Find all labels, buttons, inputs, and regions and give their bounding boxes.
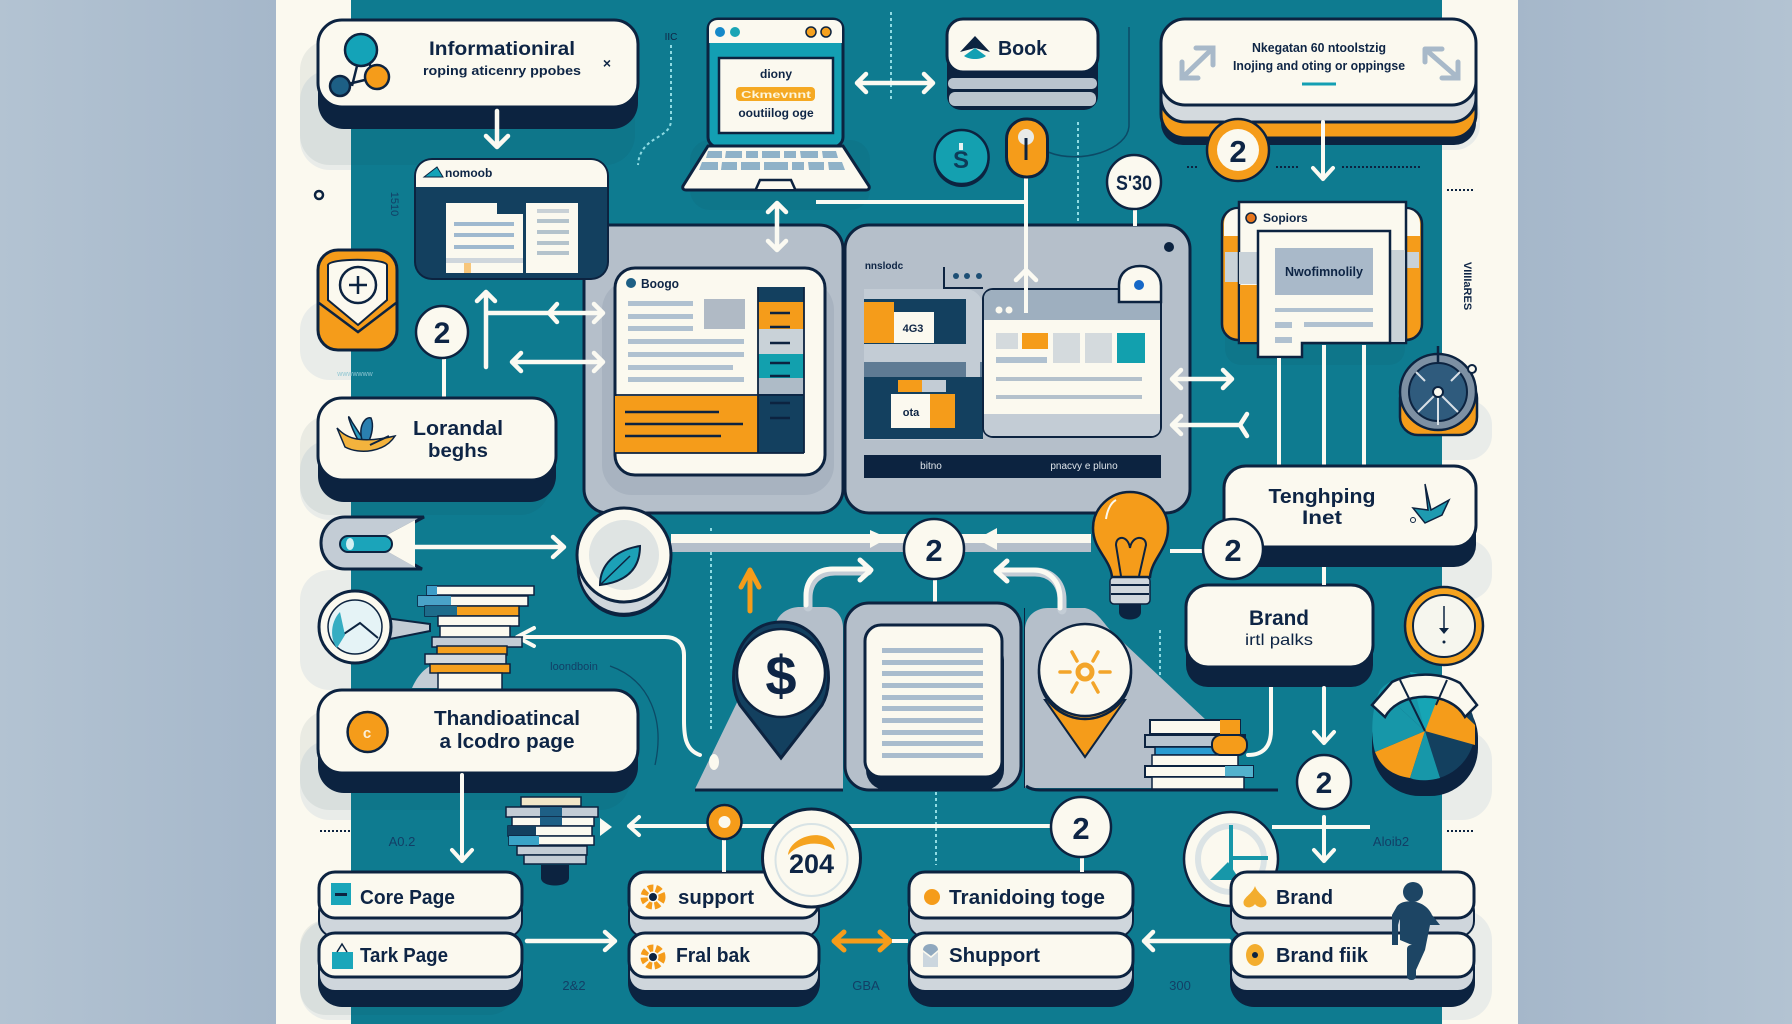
panel: support stack: Fral bak [676, 945, 751, 967]
icon: book pile right [1145, 720, 1253, 789]
arrow: orange up [741, 570, 759, 611]
icon: dollar pin: $ [765, 644, 797, 707]
connectors: support to tenghping [1279, 345, 1364, 465]
panel: core pages stack [300, 872, 523, 1015]
panel: right grey dashboard panel [845, 225, 1190, 513]
badge: 2 centre: 2 [925, 533, 943, 568]
panel: brand stack: Brand [1276, 887, 1333, 909]
icon: clock [1405, 587, 1483, 665]
connector: orange arrow to card [892, 939, 908, 943]
badge: orange 2 [1207, 119, 1269, 181]
arrow: laptop to book [857, 74, 933, 92]
connector: thick horizontal bus [671, 528, 1091, 552]
panel: support document: Nwofimnolily [1285, 264, 1364, 279]
small margin labels: A0.2 [389, 834, 415, 849]
panel: support document: Sopiors [1263, 211, 1308, 225]
connector: white horizontal line [816, 200, 1026, 204]
dark footer bar: bitno [920, 461, 942, 472]
panel: lorandal card: Lorandal [413, 418, 503, 440]
small margin labels: VIIIIaRES [1461, 262, 1473, 310]
badge: 204 [762, 809, 860, 907]
badge: 204: 204 [789, 849, 834, 879]
panel: core pages stack: Tark Page [360, 945, 448, 967]
panel: informational card [300, 20, 638, 165]
panel: trandoing stack: Tranidoing toge [949, 887, 1105, 909]
arrow: laptop panel double [768, 203, 786, 250]
panel: book stack card: Book [998, 38, 1048, 60]
small margin labels: 300 [1169, 978, 1191, 993]
icon: teal dollar coin [934, 130, 990, 187]
panel: right grey dashboard panel: nnslodc [865, 261, 904, 272]
arrow: support trandoing double orange [834, 932, 890, 950]
badge: 2 lower right: 2 [1316, 767, 1332, 800]
icon: sun pin [1039, 624, 1131, 757]
badge: 2 bottom centre: 2 [1072, 811, 1090, 846]
panel: brand stack [1230, 872, 1475, 1007]
connector: line to right [1272, 825, 1370, 829]
icon: crystal bird [337, 417, 395, 451]
panel: navigation card: Nkegatan 60 ntoolstzig [1252, 40, 1386, 55]
panel: thandioatincal card [300, 690, 638, 810]
panel: brand card: irtl palks [1245, 632, 1313, 649]
panel: left grey browser panel [584, 225, 843, 513]
arrow: long horizontal [629, 817, 1050, 835]
icon: network nodes [330, 34, 389, 96]
connectors: tenghping brand [1322, 567, 1326, 585]
icon: laptop: diony [760, 67, 792, 81]
panel: lorandal card: beghs [428, 441, 488, 462]
badge: S'30: S'30 [1116, 172, 1152, 195]
small margin labels: Aloib2 [1373, 834, 1409, 849]
document window: Boogo [641, 276, 679, 291]
arrow: 2 to brand stack [1314, 817, 1334, 861]
icon: leaf disc [577, 508, 671, 617]
curved arrows [806, 560, 1062, 610]
connector and badge: 2 beside tenghping: 2 [1224, 533, 1242, 568]
badge: 2 left: 2 [434, 317, 450, 350]
small margin labels: 2&2 [562, 978, 586, 993]
arrow: thand card to core [452, 775, 472, 861]
panel: thandioatincal card: Thandioatincal [434, 708, 580, 730]
panel: navigation card [1161, 19, 1476, 145]
document window [615, 268, 825, 475]
panel: informational card: Informationiral [429, 39, 575, 60]
badge: S'30 [1107, 155, 1161, 226]
small margin labels: GBA [852, 978, 880, 993]
arrows: dashboard right [1172, 370, 1247, 436]
arrow: core to support [527, 932, 615, 950]
arrow: brand to trandoing [1144, 932, 1229, 950]
icon: tag pill [321, 517, 424, 569]
badge: 2 left [416, 306, 468, 358]
panel: dark book window: nomoob [445, 166, 492, 180]
icon: laptop [683, 19, 870, 210]
badge: orange 2: 2 [1229, 134, 1247, 169]
small margin labels: loondboin [550, 661, 598, 673]
panel: dark book window [414, 158, 609, 280]
panel: navigation card: Inojing and oting or oppingse [1233, 58, 1405, 73]
panel: tenghping card [1224, 466, 1476, 567]
small margin labels [315, 191, 1473, 993]
connector and badge: 2 beside tenghping [1170, 519, 1263, 579]
book stack tower left [412, 586, 534, 690]
icon: dollar pin [734, 622, 828, 758]
icon: orange dot node [708, 805, 742, 872]
arrow: informational to window [486, 111, 508, 147]
panel: informational card: roping aticenry ppobes [423, 63, 581, 78]
icon: teal dollar coin: S [953, 147, 969, 174]
main window [983, 289, 1161, 437]
left mini window [864, 289, 983, 440]
panel: support stack: support [678, 887, 754, 909]
icon: laptop: Ckmevnnt [741, 90, 812, 101]
badge: 2 bottom centre [1051, 797, 1111, 872]
panel: tenghping card: Inet [1302, 508, 1343, 529]
arrow: white up to book stack curve [517, 628, 700, 755]
left mini window: ota [903, 407, 920, 419]
small margin labels: 1510 [388, 192, 400, 216]
connector: brand to books curve [1248, 672, 1271, 755]
panel: book stack card [947, 19, 1098, 110]
panel: trandoing stack [908, 872, 1134, 1007]
icon: orange pill with stem arrow [1006, 119, 1048, 313]
badge: 2 lower right [1297, 755, 1351, 809]
icon: magnifier [319, 591, 430, 663]
icon: laptop: ooutiilog oge [738, 106, 814, 120]
arrow: tag to leaf [415, 537, 564, 557]
panel: brand stack: Brand fiik [1276, 945, 1369, 967]
left mini window: 4G3 [903, 323, 923, 335]
icon: gears [644, 888, 662, 966]
panel: support stack [628, 872, 820, 1007]
panel: bottom centre group [695, 560, 1278, 790]
arrow: navigation to support [1313, 122, 1333, 179]
tab icon [1119, 266, 1161, 302]
arrows: left double arrows [477, 292, 603, 371]
dark footer bar: pnacvy e pluno [1050, 461, 1118, 472]
small margin labels: wwwwwww [336, 371, 374, 378]
panel: trandoing stack: Shupport [949, 945, 1040, 967]
arrow: brand to 2 [1314, 688, 1334, 743]
panel: core pages stack: Core Page [360, 887, 455, 909]
connector: badge 2 stem [442, 358, 446, 398]
panel: informational card: × [603, 55, 611, 71]
panel: lorandal card [300, 398, 556, 515]
panel: tenghping card: Tenghping [1268, 486, 1376, 508]
panel: support document [1222, 202, 1422, 365]
icon: teal leaf bird [1410, 484, 1449, 523]
centre document [865, 625, 1004, 790]
icon: compass dial [1184, 812, 1278, 906]
icon: light bulb [1093, 492, 1168, 620]
dark footer bar [864, 455, 1161, 478]
decorative dashed guides [320, 12, 1475, 865]
icon: pie chart [1372, 672, 1478, 796]
panel: brand card: Brand [1249, 607, 1309, 630]
icon: dial [1400, 346, 1477, 435]
badge: 2 centre [904, 519, 964, 622]
icon: person [1392, 882, 1440, 980]
panel: thandioatincal card: c [363, 725, 371, 742]
icon: orange shield badge [318, 250, 397, 350]
icon: small figure [709, 754, 719, 770]
panel: brand card [1186, 585, 1373, 687]
icon: small book tower [506, 797, 612, 886]
decorative dashed guides: IIC [665, 32, 677, 43]
panel: thandioatincal card: a lcodro page [440, 731, 574, 753]
